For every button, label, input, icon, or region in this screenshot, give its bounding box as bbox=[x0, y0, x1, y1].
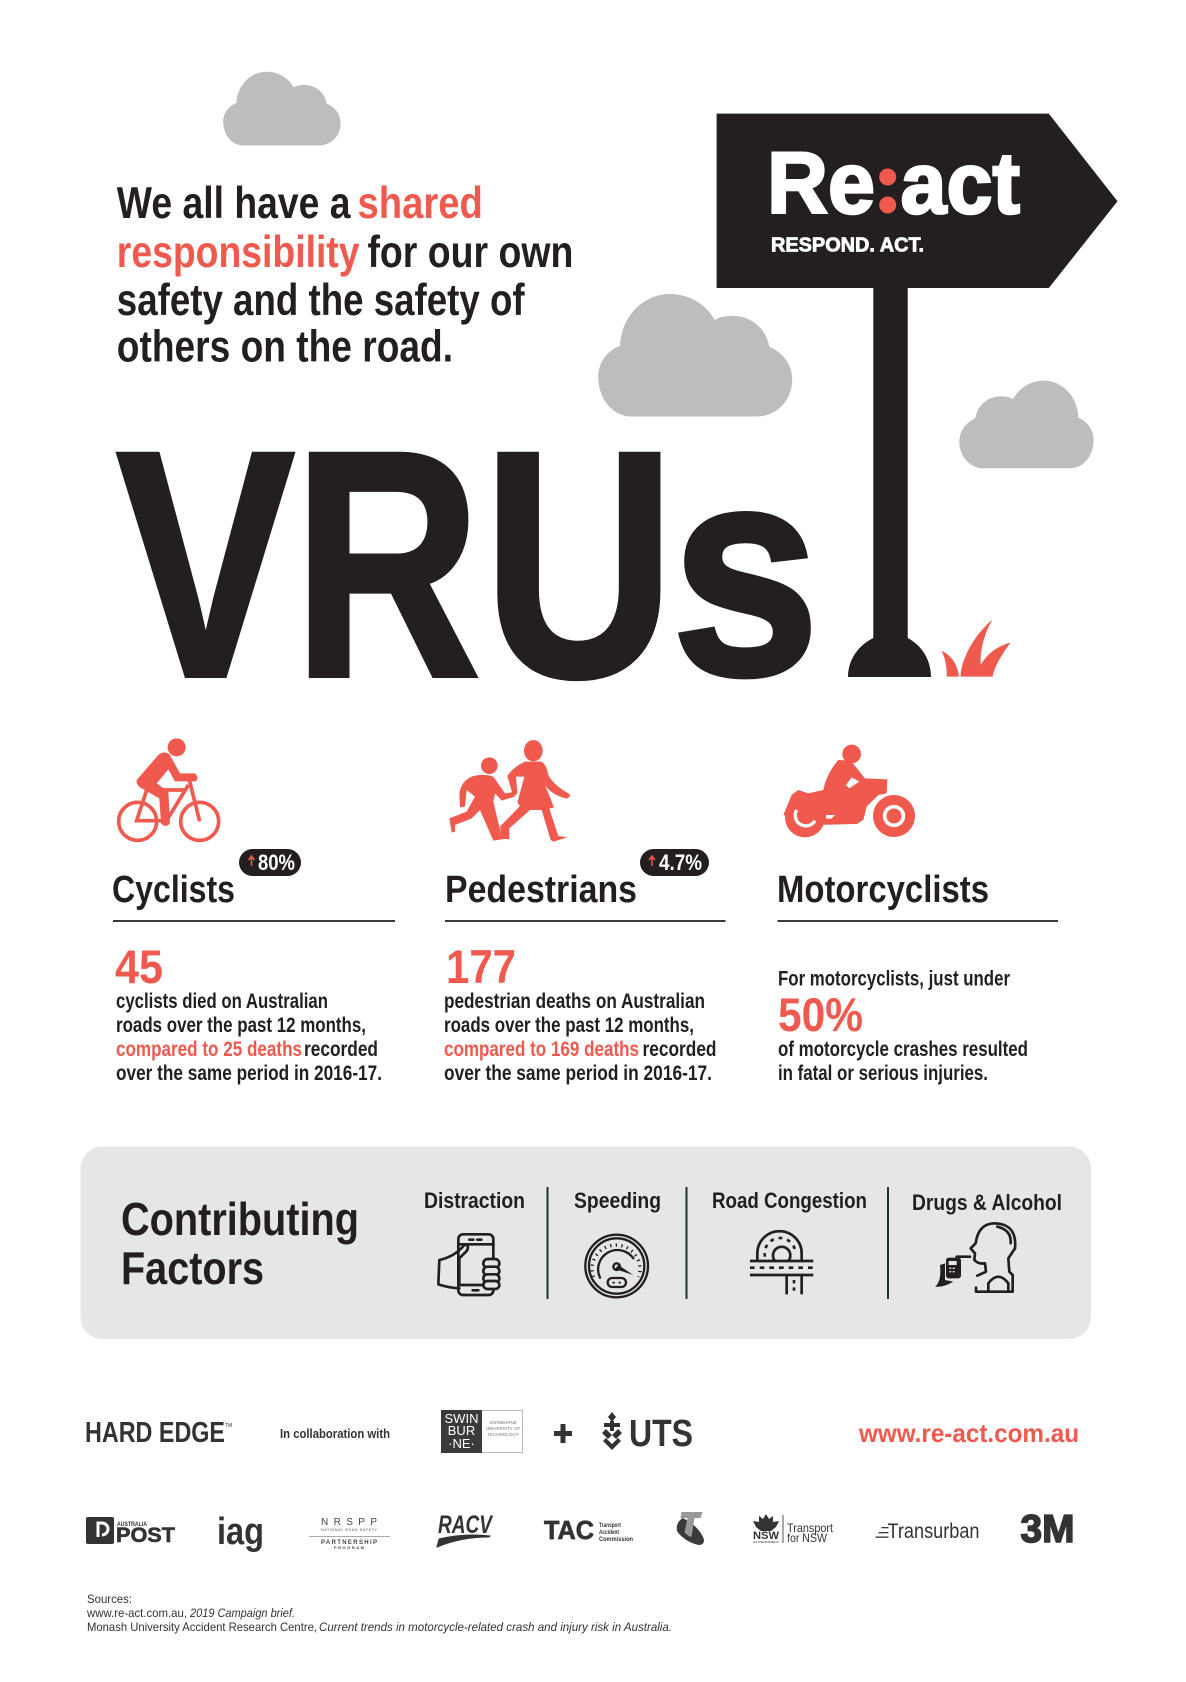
headline: safety and the safety of bbox=[117, 275, 525, 325]
logo: Swinburne: TECHNOLOGY bbox=[487, 1432, 519, 1437]
logo: TAC bbox=[544, 1515, 633, 1545]
sign post bbox=[848, 285, 931, 677]
cloud: centre bbox=[598, 294, 792, 417]
icon: grass bbox=[942, 619, 1011, 677]
logo: Swinburne: SWIN bbox=[445, 1411, 478, 1426]
heading: Contributing bbox=[121, 1193, 359, 1245]
headline: others on the road. bbox=[117, 322, 453, 372]
label: Road Congestion: Road Congestion bbox=[712, 1188, 867, 1213]
icon: speedometer bbox=[585, 1235, 648, 1297]
sign board bbox=[717, 114, 1118, 288]
logo: Re:act: act bbox=[900, 135, 1020, 232]
logo: Transurban: Transurban bbox=[888, 1520, 980, 1543]
statistic: 50%: 50% bbox=[778, 988, 863, 1041]
big title: VRUs bbox=[116, 385, 820, 745]
panel: cyclists bbox=[112, 738, 395, 1085]
logo: Hard Edge: HARD EDGE bbox=[85, 1417, 225, 1449]
logo: TAC: Commission bbox=[599, 1537, 633, 1543]
statistic: 177: 177 bbox=[446, 940, 516, 993]
body text: roads over the past 12 months, bbox=[444, 1014, 694, 1037]
logo: Swinburne bbox=[441, 1410, 522, 1453]
heading: Pedestrians bbox=[445, 869, 637, 911]
logo: Swinburne: ·NE· bbox=[448, 1436, 475, 1451]
text: in collaboration with: In collaboration with bbox=[280, 1426, 390, 1441]
logo: 3M: 3M bbox=[1020, 1508, 1074, 1551]
label: Drugs & Alcohol: Drugs & Alcohol bbox=[912, 1190, 1062, 1215]
icon: road interchange bbox=[750, 1231, 813, 1294]
cloud: top left bbox=[223, 72, 341, 146]
headline: We all have a bbox=[117, 178, 351, 228]
logo: RACV: RACV bbox=[438, 1511, 494, 1539]
panel: contributing factors bbox=[80, 1146, 1091, 1339]
logo: Telstra bbox=[677, 1512, 704, 1545]
icon: breathalyser bbox=[935, 1223, 1015, 1292]
logo: Re:act bbox=[767, 135, 1020, 232]
body text bbox=[444, 990, 716, 1085]
body text bbox=[116, 990, 382, 1085]
logo: NRSPP: PARTNERSHIP bbox=[321, 1540, 377, 1546]
logo: NRSPP bbox=[309, 1517, 390, 1550]
heading: Cyclists bbox=[112, 869, 235, 911]
panel: motorcyclists bbox=[777, 745, 1058, 1085]
body text: For motorcyclists, just under bbox=[778, 968, 1010, 990]
logo: Australia Post: AUSTRALIA bbox=[117, 1522, 148, 1528]
logo: RACV bbox=[437, 1511, 494, 1547]
plus sign bbox=[554, 1424, 572, 1443]
cloud: right bbox=[959, 381, 1094, 468]
sources: Sources: bbox=[87, 1592, 132, 1606]
logo: TAC: Transport bbox=[599, 1523, 621, 1529]
logo: TAC: TAC bbox=[544, 1515, 594, 1545]
badge: 80%: 80% bbox=[258, 850, 295, 875]
body text: pedestrian deaths on Australian bbox=[444, 990, 705, 1013]
sources: Current trends in motorcycle-related crash and injury risk in Australia. bbox=[319, 1620, 672, 1634]
logo: Transport for NSW: Transport bbox=[787, 1521, 834, 1535]
icon: motorcycle bbox=[783, 745, 915, 837]
sources bbox=[86, 1592, 672, 1634]
logo: Transport for NSW: GOVERNMENT bbox=[753, 1540, 779, 1544]
logo: Transport for NSW bbox=[753, 1514, 834, 1545]
logo: Australia Post: POST bbox=[116, 1524, 175, 1547]
logo: UTS bbox=[602, 1412, 693, 1455]
headline: responsibility bbox=[117, 227, 360, 277]
body text: cyclists died on Australian bbox=[116, 990, 328, 1013]
logo: UTS: UTS bbox=[629, 1413, 693, 1455]
body text: recorded bbox=[642, 1038, 716, 1061]
body text: over the same period in 2016-17. bbox=[444, 1062, 712, 1085]
body text: compared to 169 deaths bbox=[444, 1038, 639, 1061]
heading: Factors bbox=[121, 1242, 264, 1294]
icon: phone in hand bbox=[438, 1234, 499, 1295]
icon: cyclist bbox=[119, 738, 219, 840]
headline: shared bbox=[358, 178, 483, 228]
heading: Motorcyclists bbox=[777, 869, 989, 911]
big title: VRUs: U bbox=[483, 385, 675, 745]
logo: NRSPP: NATIONAL ROAD SAFETY bbox=[321, 1528, 378, 1532]
logo: Re:act: Re bbox=[767, 135, 875, 232]
statistic: 45: 45 bbox=[115, 940, 163, 993]
website url: www.re-act.com.au bbox=[858, 1418, 1079, 1448]
badge: 4.7% bbox=[640, 849, 709, 876]
big title: VRUs: s bbox=[672, 405, 820, 738]
headline: for our own bbox=[367, 227, 573, 277]
headline bbox=[117, 178, 573, 372]
logo: Transport for NSW: NSW bbox=[753, 1530, 780, 1542]
body text: over the same period in 2016-17. bbox=[116, 1062, 382, 1085]
logo: Swinburne: UNIVERSITY OF bbox=[486, 1426, 520, 1431]
body text: roads over the past 12 months, bbox=[116, 1014, 366, 1037]
sources: 2019 Campaign brief. bbox=[189, 1606, 295, 1620]
tagline: RESPOND. ACT. bbox=[771, 234, 924, 256]
badge: 4.7%: 4.7% bbox=[659, 850, 702, 875]
body text: in fatal or serious injuries. bbox=[778, 1062, 988, 1085]
logo: Swinburne: BUR bbox=[448, 1423, 475, 1438]
label: Speeding: Speeding bbox=[574, 1188, 661, 1213]
signpost with Re:act logo bbox=[717, 114, 1118, 677]
logo: Australia Post bbox=[86, 1517, 175, 1547]
body text: of motorcycle crashes resulted bbox=[778, 1038, 1028, 1061]
logo: iag: iag bbox=[217, 1511, 264, 1553]
big title: VRUs: R bbox=[293, 385, 481, 745]
logo: Swinburne: SWINBURNE bbox=[489, 1420, 517, 1425]
big title: VRUs: V bbox=[116, 385, 296, 745]
logo: TAC: Accident bbox=[599, 1530, 619, 1536]
body text: compared to 25 deaths bbox=[116, 1038, 302, 1061]
logo: Transport for NSW: for NSW bbox=[787, 1531, 828, 1545]
logo: Hard Edge: TM bbox=[225, 1423, 232, 1429]
logo: NRSPP: PROGRAM bbox=[334, 1545, 365, 1550]
sources: Monash University Accident Research Centre, bbox=[87, 1620, 317, 1634]
heading bbox=[121, 1193, 359, 1294]
icon: pedestrians bbox=[449, 740, 570, 842]
panel: pedestrians bbox=[444, 740, 726, 1085]
logo: NRSPP: NRSPP bbox=[321, 1517, 377, 1528]
label: Distraction: Distraction bbox=[424, 1188, 525, 1213]
badge: 80% bbox=[239, 849, 301, 876]
sources: www.re-act.com.au, bbox=[86, 1606, 187, 1620]
body text: recorded bbox=[304, 1038, 378, 1061]
body text bbox=[778, 1038, 1028, 1085]
